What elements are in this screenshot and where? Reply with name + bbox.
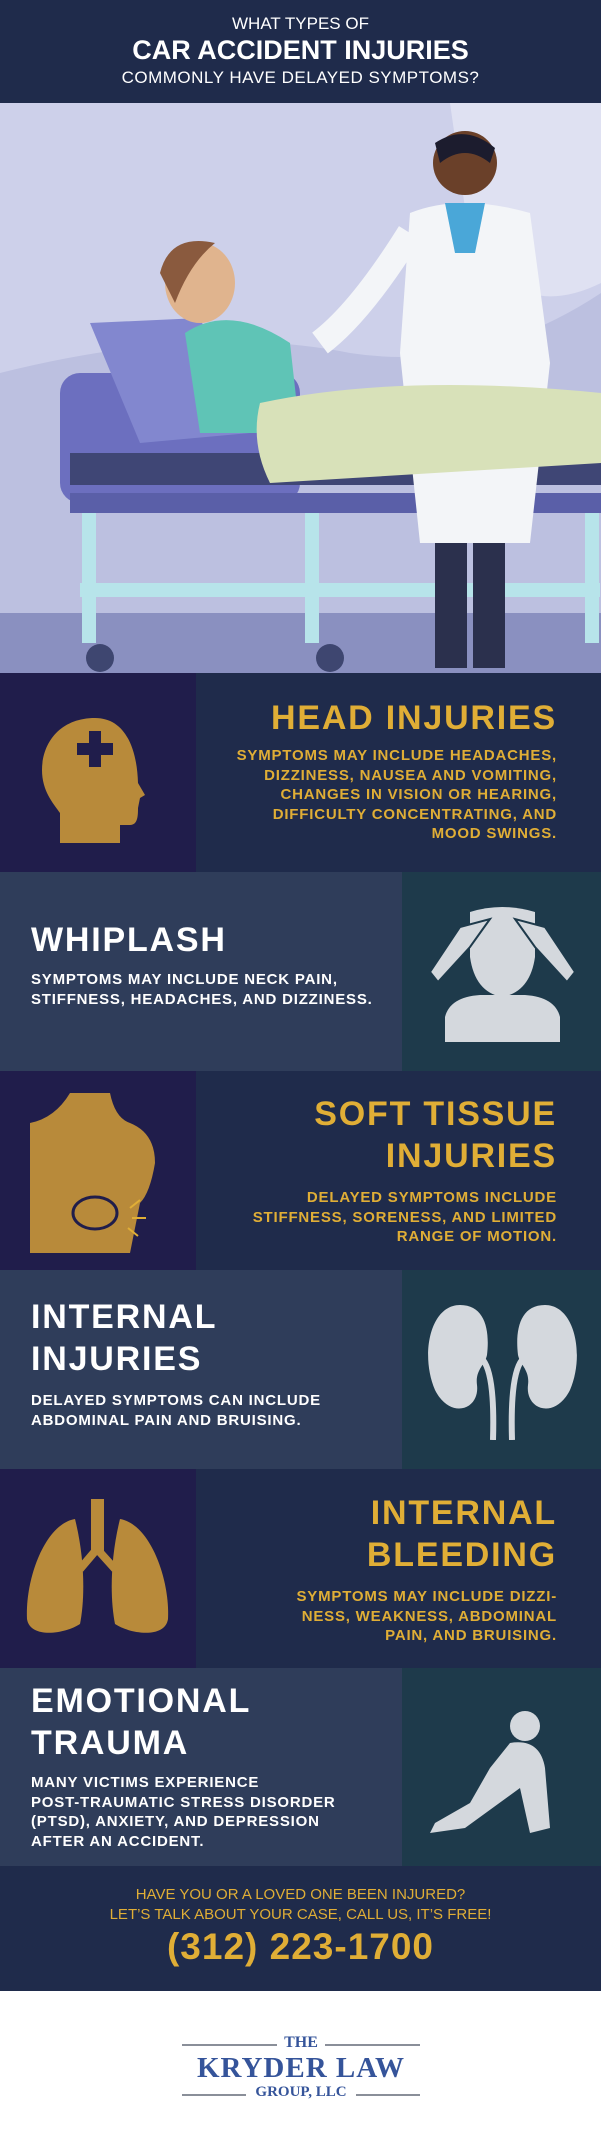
text block: MANY VICTIMS EXPERIENCE	[31, 1774, 259, 1791]
text block: MOOD SWINGS.	[432, 825, 557, 842]
patient	[165, 243, 235, 323]
sheet	[257, 385, 601, 483]
header: CAR ACCIDENT INJURIES	[132, 35, 469, 65]
phone number: (312) 223-1700	[167, 1926, 434, 1967]
heading: EMOTIONAL	[31, 1682, 251, 1720]
heading	[31, 1682, 251, 1762]
heading: INJURIES	[386, 1137, 557, 1175]
text block: NESS, WEAKNESS, ABDOMINAL	[302, 1608, 557, 1624]
text block	[237, 747, 557, 842]
text block: STIFFNESS, SORENESS, AND LIMITED	[253, 1208, 557, 1226]
callout: call to action: HAVE YOU OR A LOVED ONE BEEN INJURED?	[136, 1886, 465, 1903]
logo: THE	[284, 2034, 318, 2051]
panel: head injuries	[0, 673, 601, 872]
panel: emotional trauma	[0, 1668, 601, 1867]
text block	[31, 1392, 321, 1428]
logo: GROUP, LLC	[255, 2084, 347, 2100]
heading: HEAD INJURIES	[271, 699, 557, 737]
heading: INTERNAL	[31, 1298, 217, 1336]
heading: SOFT TISSUE	[314, 1095, 557, 1133]
panel: internal bleeding	[0, 1469, 601, 1668]
doctor	[320, 131, 550, 668]
text block	[31, 971, 373, 1008]
text block: ABDOMINAL PAIN AND BRUISING.	[31, 1412, 301, 1428]
text block: STIFFNESS, HEADACHES, AND DIZZINESS.	[31, 990, 373, 1008]
bed frame	[80, 583, 600, 597]
icon: lungs	[26, 1499, 168, 1633]
heading: INJURIES	[31, 1340, 202, 1378]
logo	[182, 2034, 420, 2100]
illustration: doctor and patient	[0, 103, 601, 673]
text block: (PTSD), ANXIETY, AND DEPRESSION	[31, 1813, 320, 1830]
header	[0, 0, 601, 103]
text block: DIZZINESS, NAUSEA AND VOMITING,	[264, 766, 557, 784]
icon: sitting person	[430, 1711, 550, 1833]
text block: SYMPTOMS MAY INCLUDE DIZZI-	[296, 1588, 557, 1605]
heading	[314, 1095, 557, 1175]
callout: call to action: LET’S TALK ABOUT YOUR CASE, CALL US, IT’S FREE!	[110, 1906, 491, 1923]
heading	[367, 1494, 557, 1574]
text block	[296, 1588, 557, 1644]
heading: BLEEDING	[367, 1536, 557, 1574]
callout: call to action	[0, 1866, 601, 1991]
header: WHAT TYPES OF	[232, 14, 369, 33]
panel: whiplash	[0, 872, 601, 1071]
icon: kidneys	[428, 1305, 577, 1440]
panel: soft tissue injuries	[0, 1071, 601, 1270]
heading	[31, 1298, 217, 1378]
text block	[253, 1189, 557, 1245]
text block: AFTER AN ACCIDENT.	[31, 1832, 204, 1850]
panel: internal injuries	[0, 1270, 601, 1469]
icon: back pain	[30, 1093, 155, 1253]
text block	[31, 1774, 336, 1850]
text block: POST-TRAUMATIC STRESS DISORDER	[31, 1794, 336, 1810]
heading: INTERNAL	[371, 1494, 557, 1532]
logo: KRYDER LAW	[197, 2052, 405, 2084]
text block: SYMPTOMS MAY INCLUDE NECK PAIN,	[31, 971, 338, 988]
text block: CHANGES IN VISION OR HEARING,	[280, 786, 557, 803]
icon: neck pain	[431, 907, 574, 1042]
text block: PAIN, AND BRUISING.	[385, 1627, 557, 1644]
icon: head with cross	[42, 718, 145, 843]
text block: SYMPTOMS MAY INCLUDE HEADACHES,	[237, 747, 557, 764]
text block: DIFFICULTY CONCENTRATING, AND	[273, 806, 557, 822]
heading: TRAUMA	[31, 1724, 189, 1762]
text block: DELAYED SYMPTOMS INCLUDE	[307, 1189, 557, 1206]
text block: RANGE OF MOTION.	[397, 1228, 557, 1245]
header: COMMONLY HAVE DELAYED SYMPTOMS?	[122, 68, 479, 87]
text block: DELAYED SYMPTOMS CAN INCLUDE	[31, 1392, 321, 1409]
heading: WHIPLASH	[31, 921, 227, 959]
